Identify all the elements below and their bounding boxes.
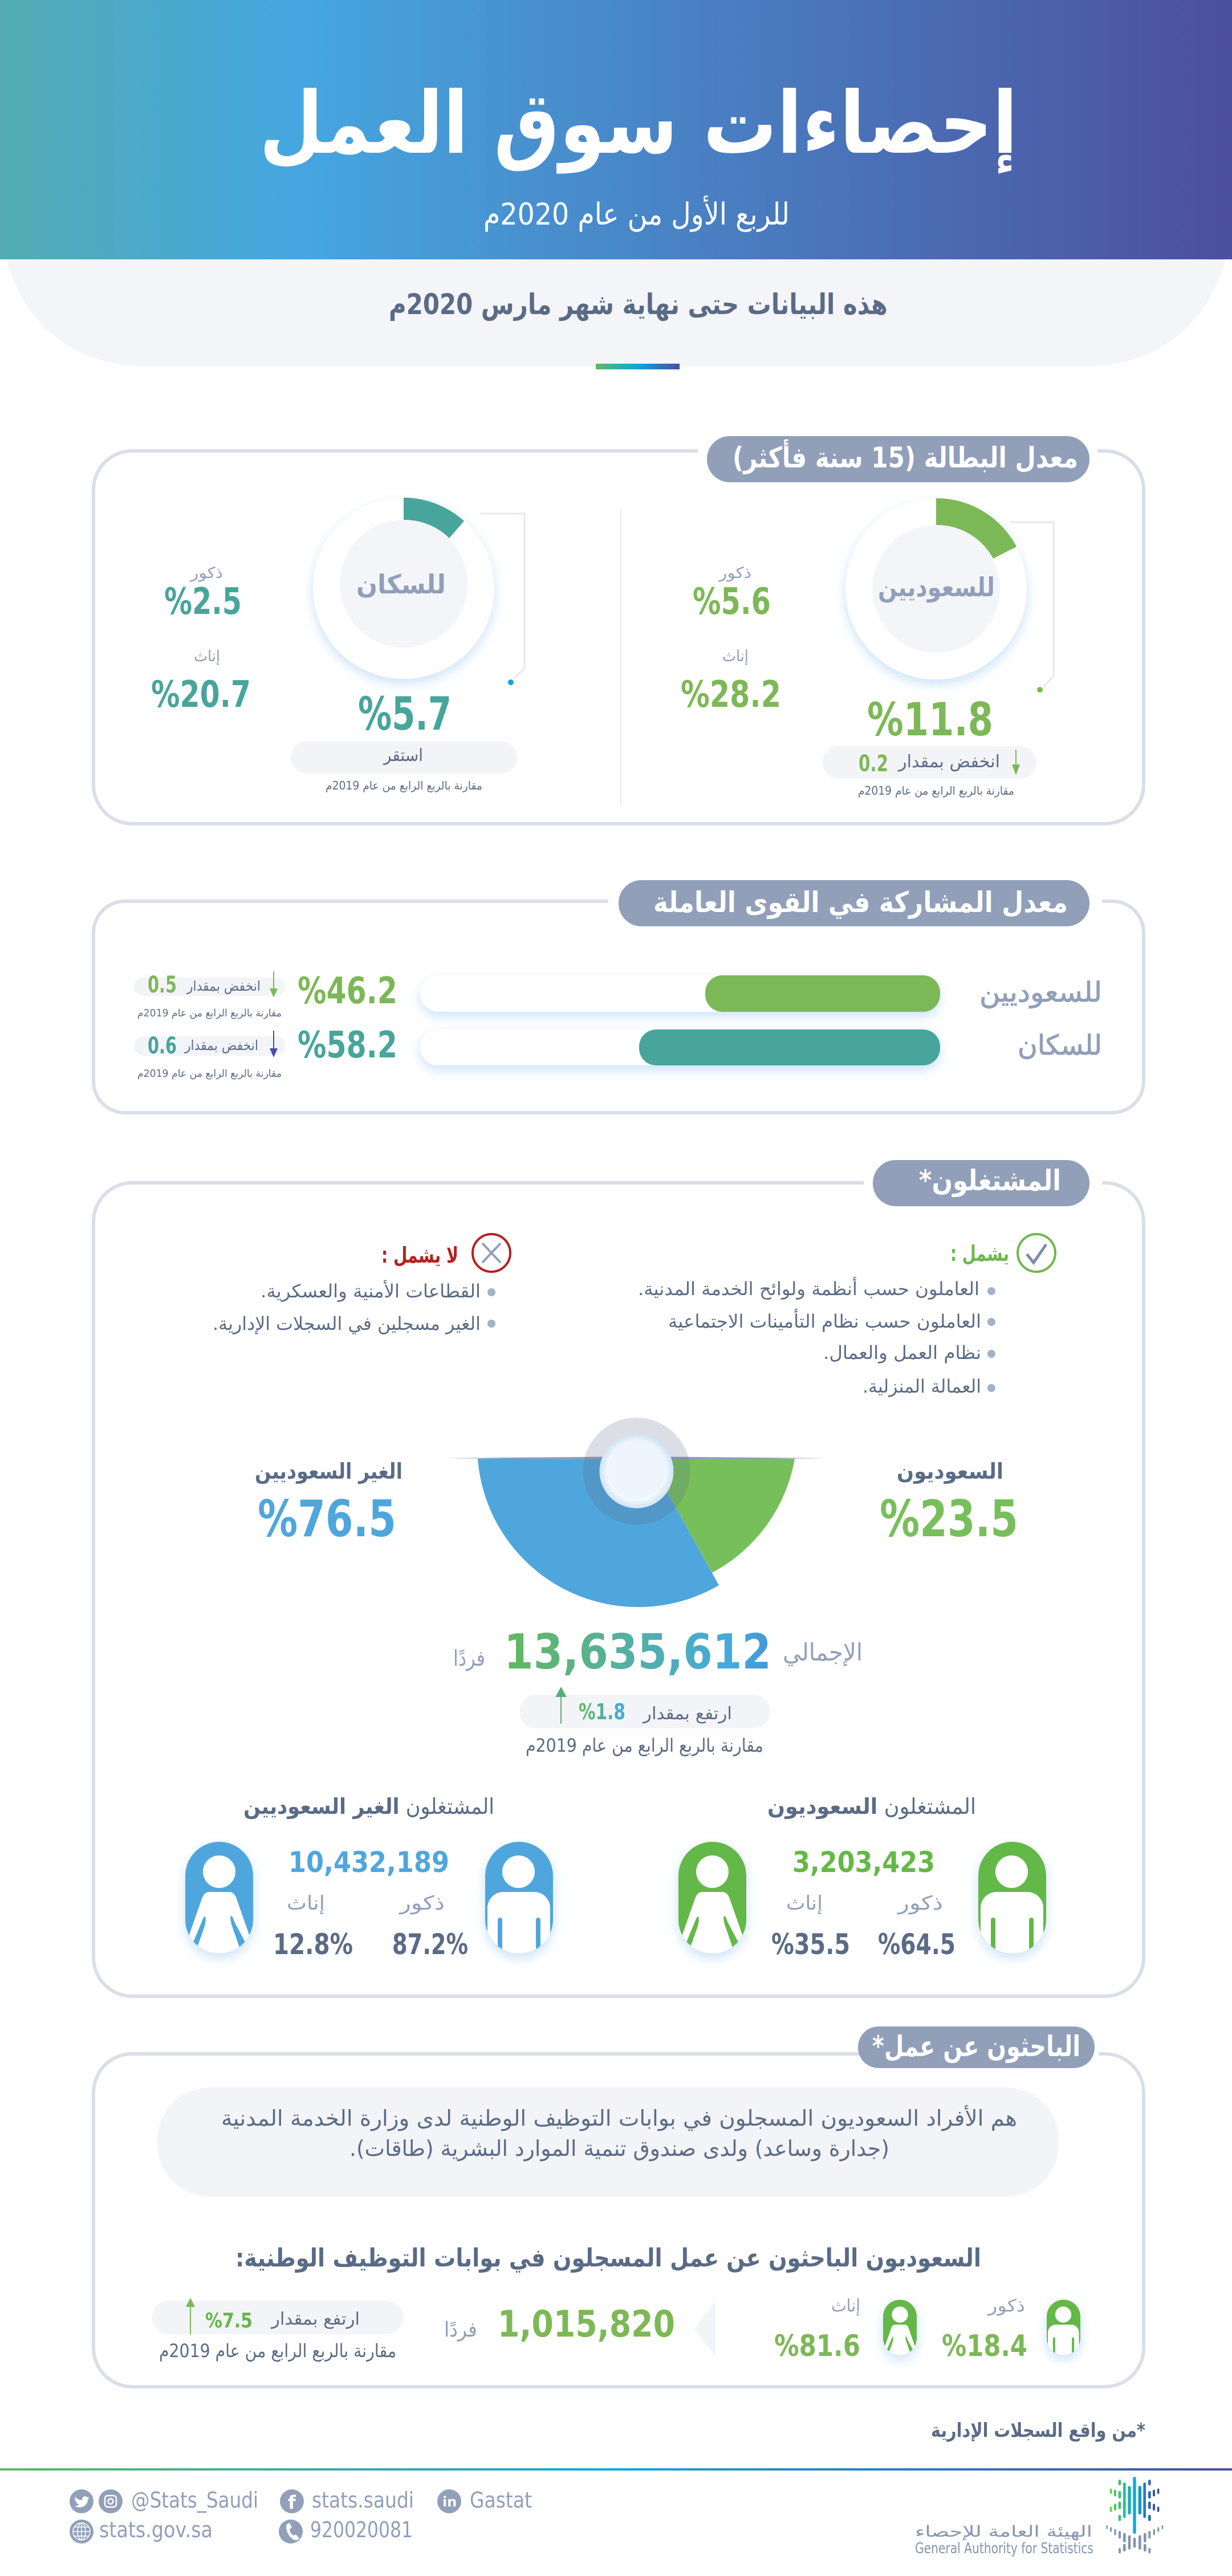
includes list: يشمل :‏ [950,1241,1009,1266]
population gender split: %20.7 [151,674,251,716]
panel: labour force participation [93,880,1144,1113]
icon: check [1018,1234,1055,1272]
seekers gender split [774,2296,1080,2363]
total employed: 13,635,612 [504,1624,771,1680]
Saudi employed breakdown: ذكور [897,1892,943,1915]
non-Saudis share [255,1459,402,1548]
icon: male non-Saudi [485,1842,553,1966]
population total rate: استقر [383,746,423,766]
donut: population: للسكان [356,569,446,600]
icon: female Saudi [675,1842,750,1956]
total employed: مقارنة بالربع الرابع من عام 2019م [526,1735,763,1756]
footer contacts: 920020081 [310,2517,413,2542]
heading: unemployment [707,436,1089,482]
population gender split: ذكور [189,564,223,582]
seekers gender split: ذكور [987,2296,1025,2316]
total employed: الإجمالي [783,1638,863,1667]
heading: participation: معدل المشاركة في القوى العاملة [653,886,1068,919]
non-Saudis share: الغير السعوديين [255,1459,402,1484]
heading: employed: *المشتغلون [919,1164,1061,1198]
Saudi participation bar: للسعوديين [979,976,1102,1008]
donut: Saudis [845,498,1054,693]
heading: job seekers [858,2026,1095,2068]
Saudis share: السعوديون [897,1459,1003,1484]
footer contacts: Gastat [470,2488,532,2513]
seekers total: ارتفع بمقدار [270,2309,360,2329]
donut: population [313,498,524,685]
icon: linkedin [437,2489,461,2513]
includes list: العمالة المنزلية.‏ [863,1376,981,1397]
Saudi total rate: انخفض بمقدار [897,752,1000,772]
icon: facebook [280,2489,304,2513]
arrow [694,2300,715,2356]
donut: Saudis: للسعوديين [878,572,995,603]
includes list: العاملون حسب أنظمة ولوائح الخدمة المدنية.‏ [638,1277,979,1300]
footer contacts: stats.saudi [312,2488,414,2513]
panel: employed persons [93,1160,1144,1996]
Saudi total rate: مقارنة بالربع الرابع من عام 2019م [858,784,1014,797]
icon: phone [279,2520,303,2544]
Saudi gender split: ذكور [718,564,751,582]
logo wordmark: الهيئة العامة للإحصاء [915,2523,1092,2541]
icon: linkedin: in [442,2494,457,2510]
heading: participation [619,880,1089,926]
icon: facebook: f [288,2492,296,2513]
seekers total: فردًا [444,2318,477,2342]
definition box [157,2087,1059,2197]
logo [915,2477,1163,2557]
includes list: العاملون حسب نظام التأمينات الاجتماعية [668,1309,981,1332]
excludes list [213,1234,510,1334]
panel: job seekers [93,2026,1144,2387]
Saudi gender split: %5.6 [693,581,771,623]
population participation bar: مقارنة بالربع الرابع من عام 2019م [137,1068,282,1080]
Saudi employed breakdown: 3,203,423 [792,1846,935,1879]
non-Saudi employed breakdown: المشتغلون الغير السعوديين [243,1794,494,1820]
footer rule [0,2468,1232,2471]
icon: cross [473,1234,510,1272]
logo mark: palm [1106,2477,1163,2553]
population participation bar: %58.2 [298,1024,397,1067]
non-Saudis share: %76.5 [258,1490,396,1548]
non-Saudi employed breakdown: 87.2% [392,1928,468,1961]
non-Saudi employed breakdown [182,1794,553,1966]
excludes list: القطاعات الأمنية والعسكرية.‏ [261,1280,481,1302]
population total rate: %5.7 [358,687,452,740]
total employed: ارتفع بمقدار [642,1704,732,1724]
icon: male Saudi [978,1842,1046,1966]
footer contacts [70,2488,532,2544]
excludes list: لا يشمل :‏ [381,1243,458,1268]
semi-circle chart: Saudi vs non-Saudi [444,1418,830,1607]
seekers gender split: إناث [831,2296,860,2316]
icon: male seeker [1047,2300,1080,2361]
seekers gender split: %81.6 [774,2329,860,2363]
heading: employed [873,1160,1089,1206]
seekers gender split: %18.4 [942,2329,1027,2363]
population participation bar [134,1024,1102,1080]
heading: unemployment: معدل البطالة (15 سنة فأكثر) [733,439,1078,475]
population total rate [291,687,517,792]
Saudi participation bar: %46.2 [298,970,397,1012]
seekers total: مقارنة بالربع الرابع من عام 2019م [159,2340,396,2362]
definition box: هم الأفراد السعوديون المسجلون في بوابات التوظيف الوطنية لدى وزارة الخدمة المدنية [221,2105,1017,2131]
population gender split [151,564,251,716]
subtitle: للربع الأول من عام 2020م [483,196,790,232]
icon: globe [70,2520,93,2544]
title: إحصاءات سوق العمل [259,74,1018,174]
Saudi total rate: %11.8 [867,693,993,746]
Saudi participation bar: 0.5 [148,972,177,998]
data note band [6,259,1226,369]
non-Saudi employed breakdown: ذكور [399,1892,445,1915]
non-Saudi employed breakdown: 10,432,189 [288,1846,449,1879]
logo wordmark: General Authority for Statistics [915,2540,1093,2557]
seekers total: 1,015,820 [498,2304,675,2346]
icon: female seeker [881,2300,918,2357]
total employed [453,1624,863,1756]
non-Saudi employed breakdown: إناث [287,1892,325,1915]
seekers total [152,2298,675,2362]
Saudi employed breakdown: %64.5 [878,1928,955,1961]
seekers total: %7.5 [205,2309,253,2333]
excludes list: الغير مسجلين في السجلات الإدارية.‏ [213,1313,481,1334]
Saudi participation bar: مقارنة بالربع الرابع من عام 2019م [137,1007,282,1019]
Saudi participation bar: انخفض بمقدار [186,978,261,994]
icon: twitter [70,2489,93,2513]
logo wordmark [915,2523,1093,2557]
population gender split: %2.5 [164,581,242,623]
Saudi gender split: إناث [722,648,749,665]
Saudi total rate: 0.2 [859,751,888,777]
Saudi participation bar [134,970,1102,1019]
Saudi employed breakdown [675,1794,1046,1966]
sub-heading: السعوديون الباحثون عن عمل المسجلون في بوابات التوظيف الوطنية:‏ [235,2244,981,2273]
population gender split: إناث [194,648,220,665]
Saudi gender split: %28.2 [681,674,781,716]
data note band: هذه البيانات حتى نهاية شهر مارس 2020م [389,288,888,322]
population participation bar: 0.6 [148,1033,177,1059]
population participation bar: للسكان [1018,1029,1102,1061]
includes list: نظام العمل والعمال.‏ [823,1342,981,1364]
Saudi employed breakdown: المشتغلون السعوديون [767,1794,976,1820]
non-Saudi employed breakdown: 12.8% [273,1928,353,1961]
Saudis share: %23.5 [880,1490,1018,1548]
includes list [638,1234,1055,1397]
header banner [0,0,1232,259]
Saudi gender split [681,564,781,716]
total employed: %1.8 [579,1699,625,1724]
Saudi employed breakdown: %35.5 [771,1928,850,1961]
icon: instagram [99,2489,123,2513]
Saudi employed breakdown: إناث [786,1892,823,1915]
Saudi total rate [823,693,1036,797]
total employed: فردًا [453,1646,485,1671]
panel: unemployment rate [93,436,1144,824]
definition box: ‏(جدارة وساعد) ولدى صندوق تنمية الموارد البشرية (طاقات).‏ [349,2136,889,2162]
icon: female non-Saudi [182,1842,257,1956]
population total rate: مقارنة بالربع الرابع من عام 2019م [326,779,482,792]
footer contacts: @Stats_Saudi [131,2488,258,2513]
population participation bar: انخفض بمقدار [184,1037,258,1053]
source note: ‏*من واقع السجلات الإدارية [931,2419,1145,2442]
footer contacts: stats.gov.sa [99,2517,213,2542]
heading: job seekers: *الباحثون عن عمل [872,2030,1080,2064]
Saudis share [880,1459,1018,1548]
